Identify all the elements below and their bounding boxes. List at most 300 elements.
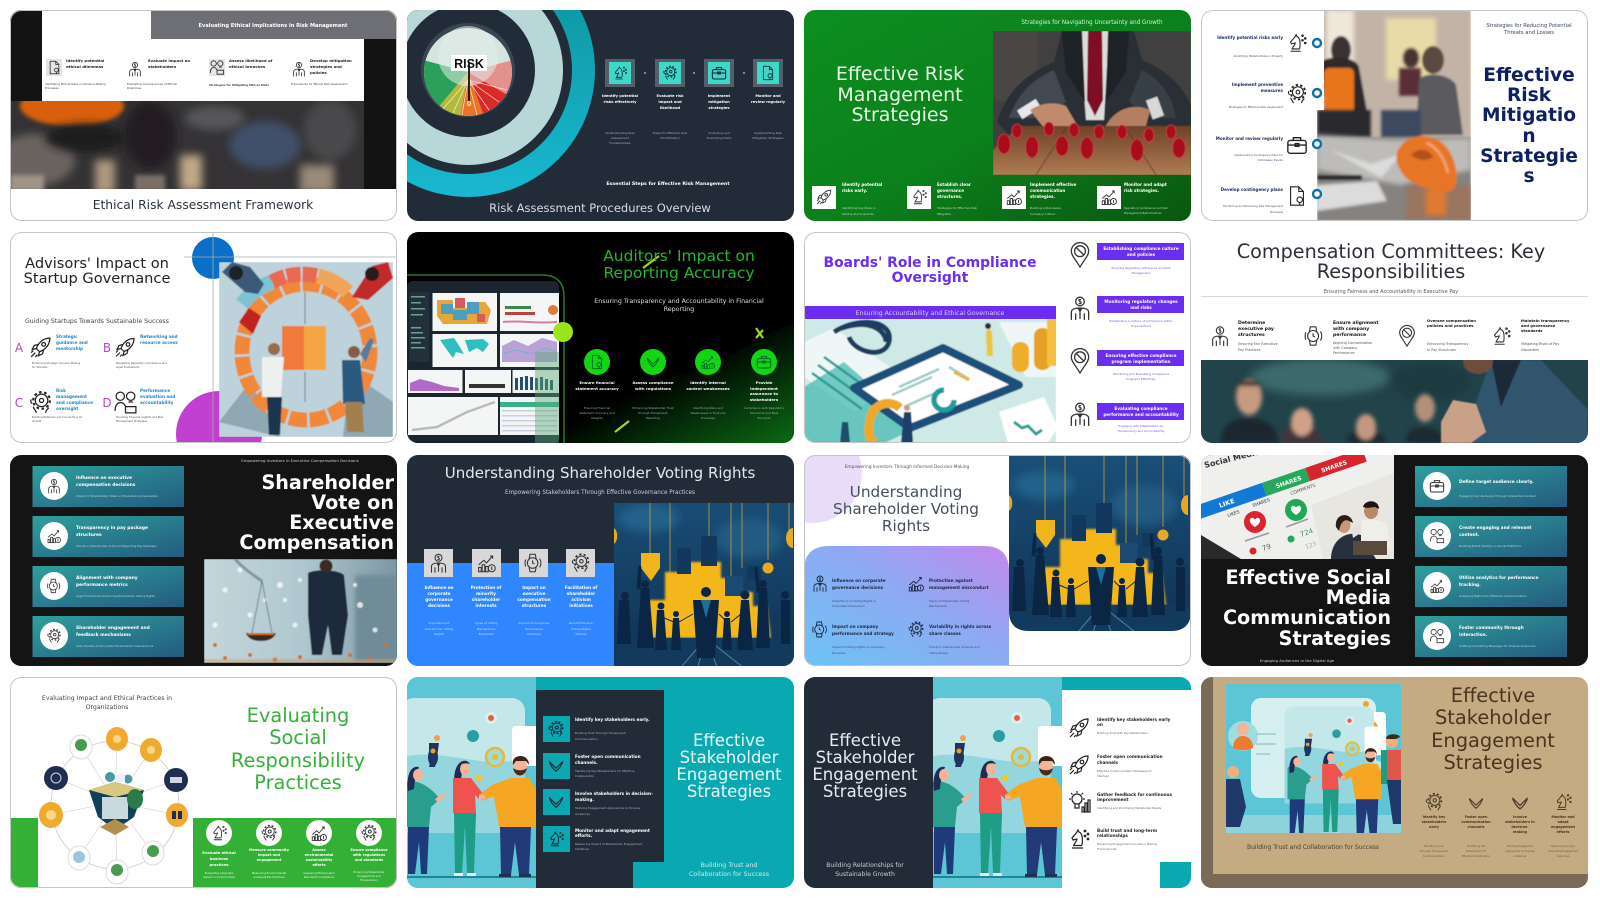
item: evaluate impact: Evaluate impact on <box>148 58 190 63</box>
photo: social media dashboard: Social Media <box>1203 447 1261 470</box>
item 1: Identify key stakeholders early <box>1097 717 1171 722</box>
item 3: compensation <box>517 597 551 602</box>
item 2: Establishing a Culture of Compliance within <box>1110 319 1173 323</box>
item 1: Identify potential <box>842 182 883 187</box>
title: Understanding Shareholder Voting Rights <box>445 464 755 482</box>
item 1 <box>1071 243 1184 275</box>
card 4: Case Studies of Successful Shareholder Interventions <box>76 644 154 648</box>
item 2: Strategies for Effective Risk Assessment <box>1229 105 1283 109</box>
item 2: Identifying Key Stakeholders for Effective <box>575 769 635 773</box>
item 2: Measure community <box>249 848 290 852</box>
item 4: Variability in rights across <box>929 624 992 629</box>
item 4: independent <box>750 386 778 391</box>
item 4: Measuring Impact of Stakeholder Engagement <box>575 842 643 846</box>
card 1 <box>1415 466 1567 507</box>
item 1: Influence on <box>424 585 454 590</box>
item 2: Explained <box>479 632 493 636</box>
photo: social media dashboard: LIKE <box>1218 497 1236 510</box>
icon: risk gauge with rings <box>407 10 595 197</box>
item 2 <box>471 549 502 636</box>
item 4 <box>744 349 785 420</box>
item 2: Reporting <box>646 416 660 420</box>
item 1: Establishing compliance culture <box>1103 246 1179 251</box>
item 3: Programs Effectively <box>1126 377 1156 381</box>
item 1: governance decisions <box>832 585 884 590</box>
card 2: content. <box>1459 532 1480 538</box>
panel: Understanding Shareholder Voting Rights (dark) <box>407 455 799 703</box>
title: Effective <box>1483 65 1575 86</box>
title: Media <box>1326 586 1391 609</box>
item 3: Involve stakeholders in decision- <box>575 791 653 796</box>
item 4: Recent Trends in <box>569 621 593 625</box>
title: Auditors' Impact on <box>603 247 755 265</box>
item 1 <box>202 820 236 879</box>
item: evaluate impact <box>127 58 190 90</box>
item: identify potential ethical dilemmas: Identify potential <box>66 58 104 63</box>
item 4: Measuring Success: <box>1551 844 1576 848</box>
item 3: making. <box>575 797 594 802</box>
card 2 <box>32 516 184 557</box>
item 4: adapt <box>1557 820 1569 824</box>
item 2: through Transparent <box>638 411 669 415</box>
item 2: governance <box>937 188 964 193</box>
tagline: Building Relationships for <box>826 862 904 869</box>
caption: Ethical Risk Assessment Framework <box>93 198 314 212</box>
item 2: Organizations <box>1131 324 1151 328</box>
illustration: voters <box>1009 455 1191 631</box>
title: Responsibilities <box>1317 260 1465 283</box>
item 1: Ensuring Regulatory Adherence and Risk <box>1112 266 1171 270</box>
item 2: Mitigation <box>937 212 952 216</box>
step 3: strategies <box>708 106 730 110</box>
item 2: channels. <box>575 760 598 765</box>
item: assess likelihood: Assess likelihood of <box>229 58 273 63</box>
item 2: Effective Communication Strategies for <box>1097 769 1153 773</box>
item 4: Compliance with Regulatory <box>744 406 785 410</box>
item: identify potential ethical dilemmas: Processes <box>45 86 59 90</box>
tagline: Empowering Stakeholders Through Effective Governance Practices <box>505 490 695 496</box>
item 4: Monitor and adapt engagement <box>575 828 650 833</box>
item B: B <box>103 341 111 355</box>
item 2: Effective Collaboration <box>1462 854 1491 858</box>
item 4: Voting Power <box>929 651 949 655</box>
photo: blurred room and orange bag <box>1317 11 1471 220</box>
tagline: Evaluating Impact and Ethical Practices in <box>42 695 172 702</box>
item 4: Trends in Shareholder Activism and <box>928 645 980 649</box>
item 4: activism <box>571 597 592 602</box>
item 3: Implement effective <box>1030 182 1077 187</box>
item 3: Audiences <box>575 812 590 816</box>
item: identify potential ethical dilemmas: Identifying Ethical Risks in Decision-Making <box>45 82 106 86</box>
item C: and compliance <box>56 400 93 405</box>
title: Strategies <box>1443 751 1543 774</box>
item: develop mitigation: strategies and <box>310 64 342 69</box>
item D: Management Strategies <box>116 419 148 423</box>
title: Compensation <box>239 531 394 554</box>
item 3: program implementation <box>1111 359 1171 364</box>
item 3: Identifying and Prioritizing Stakeholder Needs <box>1097 806 1162 810</box>
item 1: Ensuring Financial <box>584 406 610 410</box>
item 1: Integrity <box>591 416 603 420</box>
item 2: Startups <box>1097 774 1109 778</box>
item 1: Rights <box>434 632 444 636</box>
item 1: Determine <box>1238 320 1265 326</box>
tagline: Reporting <box>664 306 694 313</box>
item C: management <box>56 394 87 399</box>
tagline: Building Trust and Collaboration for Success <box>1247 844 1379 851</box>
item 2: Performance <box>1333 351 1354 355</box>
card 2: structures <box>76 532 102 538</box>
title: Risk <box>1507 85 1552 106</box>
item C: Growth <box>32 419 42 423</box>
title: Reporting Accuracy <box>603 264 755 282</box>
step 4: Implementing Risk <box>754 131 782 135</box>
item 4 <box>1495 318 1570 352</box>
item 3: Unforeseen Events <box>1258 158 1284 162</box>
tagline: Threats and Losses <box>1503 30 1554 36</box>
title: Responsibility <box>231 749 365 772</box>
step 4: Mitigation Strategies <box>752 136 784 140</box>
item 3: Impact on Corporate <box>518 621 550 625</box>
item 3: stakeholders in <box>1505 820 1535 824</box>
item 3 <box>1069 791 1172 812</box>
item 1: on <box>1097 722 1103 727</box>
item 3 <box>1216 136 1321 162</box>
photo: social media dashboard: 123 <box>1304 540 1318 551</box>
step 1: Fundamentals <box>609 141 631 145</box>
step 2: likelihood <box>660 106 680 110</box>
card 2: Building Brand Identity on Social Platforms <box>1459 544 1521 548</box>
item 3 <box>517 549 551 636</box>
item B: Legal Frameworks <box>116 365 140 369</box>
band <box>804 306 1056 319</box>
item 3: in Pay Structures <box>1427 348 1456 352</box>
item C: oversight <box>56 406 78 411</box>
item 3: Monitoring and Evaluating Compliance <box>1113 372 1169 376</box>
title: Stakeholder <box>1435 706 1551 729</box>
item 1: statement accuracy <box>575 386 619 391</box>
item 3: Oversee compensation <box>1427 318 1476 323</box>
item 2: interests <box>475 603 497 608</box>
tagline: Guiding Startups Towards Sustainable Success <box>25 318 169 325</box>
tagline: Organizations <box>86 704 128 711</box>
item 4 <box>565 549 597 636</box>
item 3: Approaches for Diverse <box>1505 849 1535 853</box>
photo: social media dashboard <box>1201 455 1394 559</box>
item: evaluate impact: Evaluating Consequences of Ethical <box>127 82 177 86</box>
item 4: Regulatory Compliance and Risk <box>1124 206 1168 210</box>
item 1 <box>1070 717 1171 737</box>
item 4: shareholder <box>567 591 596 596</box>
title: Mitigatio <box>1482 105 1576 126</box>
item 3 <box>813 622 894 655</box>
panel: Effective Risk Management Strategies <box>804 10 1191 221</box>
item 3: Identifying Risks and <box>693 406 723 410</box>
item: assess likelihood: Strategies for Mitigating Ethical Risks <box>209 83 269 87</box>
item 4 <box>909 622 992 655</box>
item 4: standards <box>1521 328 1543 333</box>
item 2: Enhancing Stakeholder Trust <box>632 406 675 410</box>
item: develop mitigation: policies <box>310 70 327 75</box>
item 1: Startup Environments <box>842 212 874 216</box>
item 1: Pay Practices <box>1238 348 1261 352</box>
item 3: Building a Risk-Aware <box>1030 206 1061 210</box>
item 3 <box>1071 349 1184 381</box>
item 2 <box>249 820 290 879</box>
item 3: Tailoring Engagement Approaches to Diverse <box>574 806 640 810</box>
title: Effective Risk <box>836 63 964 85</box>
item 2 <box>632 349 675 420</box>
title: Engagement <box>812 765 918 784</box>
item 4: Mitigating Risks of Pay <box>1521 342 1559 346</box>
title: Vote on <box>311 491 394 514</box>
card 1: Engaging Your Audience Through Interactive Content <box>1459 494 1537 498</box>
item D: Providing Financial Insights and Risk <box>116 415 164 419</box>
step 2 <box>653 59 695 140</box>
item 4: performance and accountability <box>1103 412 1179 417</box>
item 4: Enhancing Stakeholder <box>353 870 385 874</box>
item 1: Ensure financial <box>579 380 615 385</box>
item 2: Foster open communication <box>575 754 641 759</box>
item 1 <box>424 549 454 636</box>
item 2: measures <box>1261 88 1284 93</box>
subtitle: Essential Steps for Effective Risk Management <box>606 181 730 187</box>
item 1: executive pay <box>1238 326 1274 332</box>
photo: man with scale <box>204 559 397 663</box>
title: Startup Governance <box>24 270 170 287</box>
item 4: Monitor and adapt <box>1124 182 1167 187</box>
illustration: voters <box>614 503 794 666</box>
item 3: strategies. <box>1030 194 1055 199</box>
card 3: performance metrics <box>76 582 128 588</box>
item 4: Provide <box>756 380 773 385</box>
photo: social media dashboard: COMMENTS <box>1290 483 1317 497</box>
photo: social media dashboard: SHARES <box>1320 459 1348 475</box>
title: Social <box>269 726 327 749</box>
title: Shareholder Voting <box>833 500 979 518</box>
item C <box>15 388 93 423</box>
item 2: with company <box>1333 326 1369 332</box>
item 3: executive <box>523 591 546 596</box>
item 4: Measuring Engagement Success in Startup <box>1097 842 1157 846</box>
item 4: Engagement and <box>357 874 381 878</box>
item 3: Impact of Voting Rights on Company <box>832 645 885 649</box>
item B <box>103 334 178 369</box>
card 4 <box>1415 616 1567 657</box>
card 3: tracking. <box>1459 582 1481 588</box>
item 4: Evaluating compliance <box>1114 406 1168 411</box>
tagline: Strategies for Reducing Potential <box>1486 23 1572 29</box>
title: Rights <box>882 517 930 535</box>
item 1: early <box>1429 825 1440 829</box>
item 2: management misconduct <box>929 585 989 590</box>
item 1: Identify potential risks early <box>1217 35 1283 40</box>
item 2: Collaboration <box>575 774 594 778</box>
tagline: Building Trust and <box>701 862 757 869</box>
item 1: practices <box>209 863 229 867</box>
item 4: risk strategies. <box>1124 188 1159 193</box>
item 2: Measuring Environmental <box>252 871 286 875</box>
item: identify potential ethical dilemmas <box>45 58 106 90</box>
item A: guidance and <box>56 340 88 345</box>
item 3 <box>1505 798 1535 858</box>
item 4: Disparities <box>1521 348 1539 352</box>
item 4: Engaging with Stakeholders for <box>1118 424 1164 428</box>
item 1: business <box>210 857 229 861</box>
item 3: Impact on <box>522 585 546 590</box>
item 4: Facilitation of <box>565 585 597 590</box>
item 1: and policies <box>1127 252 1156 257</box>
title: Strategie <box>1480 146 1578 167</box>
item 1: Identifying Key Risks in <box>842 206 876 210</box>
item 4 <box>543 826 650 852</box>
item 1: Through Transparent <box>1418 849 1449 853</box>
item 1: risks early. <box>842 188 868 193</box>
item 1 <box>575 349 619 420</box>
item 1: stakeholders <box>1422 820 1446 824</box>
item A: Enhancing Strategic Decision-Making <box>32 361 81 365</box>
photo: social media dashboard: 79 <box>1261 542 1272 553</box>
title: Management <box>837 84 963 106</box>
title: Compensation Committees: Key <box>1237 240 1545 263</box>
card 3 <box>32 566 184 607</box>
header band: Evaluating Ethical Implications in Risk Management <box>199 23 348 29</box>
item 4 <box>1097 182 1168 215</box>
card 4: Foster community through <box>1459 625 1524 631</box>
panel: Evaluating Social Responsibility Practices <box>10 677 397 888</box>
item 2 <box>1071 296 1184 328</box>
item 2: and risks <box>1130 305 1152 310</box>
item 4: engagement <box>1551 825 1575 829</box>
item 1 <box>1213 320 1278 352</box>
item C: C <box>15 396 23 410</box>
tagline: Collaboration for Success <box>689 871 769 878</box>
step 2: impact and <box>658 100 682 104</box>
item D: accountability <box>140 400 174 405</box>
title: Practices <box>254 771 342 794</box>
item 2: Monitoring regulatory changes <box>1104 299 1178 304</box>
item 4: Maintain transparency <box>1521 318 1570 323</box>
panel: Effective Stakeholder Engagement Strategies (teal) <box>401 677 794 888</box>
tagline: Empowering Investors Through Informed Decision-Making <box>845 464 970 470</box>
item 1: Evaluating Corporate <box>205 871 234 875</box>
photo: social media dashboard: LIKES <box>1227 509 1241 519</box>
step 1: Understanding Risk <box>605 131 635 135</box>
title: Strategies <box>1279 627 1391 650</box>
title: Strategies <box>687 782 771 801</box>
item 3 <box>1002 182 1077 216</box>
step 1 <box>602 59 646 145</box>
item 2 <box>543 753 641 779</box>
dark panel <box>536 690 664 888</box>
photo: executive pointing <box>1201 360 1588 443</box>
item 3 <box>303 820 336 879</box>
item: assess likelihood: ethical breaches <box>229 64 266 69</box>
item 4 <box>350 820 388 882</box>
item 3: Audiences <box>1514 854 1527 858</box>
item 2: Implement preventive <box>1232 82 1283 87</box>
item D: D <box>102 396 112 410</box>
band: Ensuring Accountability and Ethical Governance <box>856 310 1005 317</box>
card 1: Define target audience clearly. <box>1459 479 1534 485</box>
item 1: Ensuring Fair Executive <box>1238 342 1278 346</box>
card 4: feedback mechanisms <box>76 632 131 638</box>
item 2 <box>1229 82 1321 109</box>
illustration: isometric compliance documents <box>804 319 1056 443</box>
item 2: Ensure alignment <box>1333 320 1379 326</box>
illustration: stakeholder handshake <box>933 677 1062 888</box>
item 3: Involve <box>1513 815 1528 819</box>
tagline: Ensuring Fairness and Accountability in Executive Pay <box>1324 289 1458 295</box>
item 1: Management <box>1131 271 1151 275</box>
item 2: Foster open communication <box>1097 754 1163 759</box>
card 1: Influence on executive <box>76 475 132 481</box>
item 2: Sustainability Practices <box>253 875 285 879</box>
step 3: mitigation <box>708 100 730 104</box>
item 2: Types of Shareholder Voting <box>928 599 970 603</box>
item 3: structures <box>522 603 547 608</box>
dashboard screenshot <box>407 275 564 443</box>
item 3: Weaknesses in Financial <box>691 411 726 415</box>
item 3 <box>686 349 730 420</box>
item A <box>15 334 88 369</box>
photo: social media dashboard: SHARES <box>1252 497 1271 509</box>
item 4: Environments <box>1097 847 1117 851</box>
panel: Shareholder Vote on Executive Compensation <box>10 455 397 666</box>
title: Strategies <box>823 782 907 801</box>
item 4: Transparency <box>359 878 378 882</box>
tagline: Empowering Investors in Executive Compensation Decisions <box>241 458 359 463</box>
item 2: channels <box>1467 825 1485 829</box>
item 4: share classes <box>929 631 961 636</box>
step 2: Steps for Effective Risk <box>653 131 688 135</box>
item 3: Ensuring effective compliance <box>1106 353 1177 358</box>
item C: Building Networks and Connections for <box>32 415 83 419</box>
photo: blurred workers <box>11 101 364 189</box>
item 1: Shareholder Voting <box>425 627 453 631</box>
item 1: Building Trust Through Transparent <box>575 731 626 735</box>
panel: Effective Social Media Communication Strategies <box>1196 447 1588 666</box>
step 3: Evaluating Risks <box>707 136 732 140</box>
item 4: Voting Rights <box>571 627 591 631</box>
illustration: stakeholder meeting <box>1226 684 1401 833</box>
item 2: Mechanisms <box>477 627 496 631</box>
item A: Strategic <box>56 334 78 339</box>
item 1 <box>1418 794 1449 858</box>
card 4: Crafting Compelling Messages for Diverse Audiences <box>1459 644 1536 648</box>
illustration: stakeholder handshake <box>407 677 536 888</box>
item 3: performance and strategy <box>832 631 894 636</box>
item 4 <box>1071 403 1184 433</box>
item 2: Stakeholders for <box>1466 849 1487 853</box>
item 4: Build trust and long-term <box>1097 828 1158 833</box>
panel: Compensation Committees: Key Responsibilities <box>1201 232 1588 443</box>
item 1: Impact on Communities <box>203 875 236 879</box>
panel: Boards' Role in Compliance Oversight <box>804 232 1191 443</box>
item 4: Monitoring and Reviewing Risk Management <box>1223 204 1283 208</box>
item 2: with Company <box>1333 346 1357 350</box>
item 4: and governance <box>1521 323 1556 328</box>
item 3: Implementing Contingency Plans for <box>1234 153 1284 157</box>
item 1: Importance of Voting Rights in <box>832 599 876 603</box>
title: Effective Social <box>1226 566 1391 589</box>
item 3: Gather feedback for continuous <box>1097 792 1172 797</box>
item: assess likelihood <box>209 58 273 87</box>
item 4: Initiatives <box>575 847 590 851</box>
item 4: Practices <box>757 416 771 420</box>
item 3: environmental <box>305 853 333 857</box>
title: Communication <box>1223 606 1391 629</box>
